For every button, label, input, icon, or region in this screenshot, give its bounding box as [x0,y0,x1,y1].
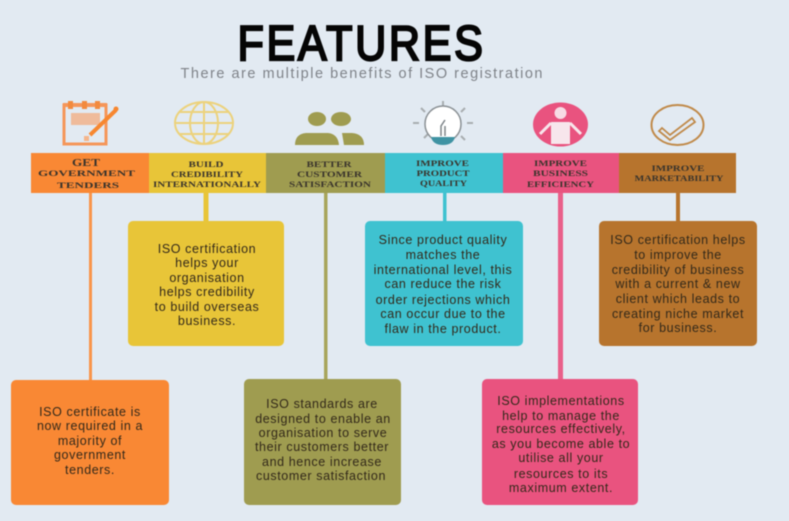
connector: cyan [443,193,446,222]
panel: product quality: order rejections which [376,293,510,307]
header: better customer satisfaction: BETTER [306,159,353,169]
header: get government tenders: GOVERNMENT [38,168,136,178]
header: improve product quality: QUALITY [420,178,467,188]
panel: customer satisfaction [244,379,401,505]
header: improve marketability: MARKETABILITY [634,173,724,183]
panel: government tenders: ISO certificate is [39,405,141,419]
icon: person in pink circle [533,102,588,146]
header: better customer satisfaction: CUSTOMER [297,169,363,179]
icon: globe [175,102,233,144]
panel: credibility: helps credibility [159,285,255,299]
panel: marketability: creating niche market [612,307,744,321]
panel: product quality [365,221,523,346]
panel: credibility: organisation [169,271,245,285]
header: improve product quality: PRODUCT [416,168,470,178]
header: build credibility internationally: BUILD [188,159,224,169]
panel: business efficiency [482,379,638,505]
panel: credibility [128,221,284,346]
header: get government tenders: TENDERS [57,180,119,190]
header: build credibility internationally [149,153,266,193]
subtitle: There are multiple benefits of ISO registration [180,66,542,82]
panel: business efficiency: utilise all your [518,451,604,465]
header: improve marketability: IMPROVE [652,163,705,173]
header: better customer satisfaction [266,153,385,193]
panel: government tenders: majority of [58,434,122,448]
panel: credibility: ISO certification [158,242,256,256]
header: get government tenders [31,153,149,193]
panel: business efficiency: maximum extent. [509,481,613,495]
panel: marketability: for business. [639,321,717,335]
title: FEATURES [238,17,486,71]
panel: customer satisfaction: and hence increase [262,455,382,469]
panel: credibility: to build overseas [155,300,259,314]
header: improve business efficiency: BUSINESS [533,168,588,178]
panel: marketability: ISO certification helps [610,233,746,247]
panel: marketability [599,221,757,346]
connector: yellow [204,193,208,222]
header bar [31,153,736,193]
panel: product quality: matches the [406,248,480,262]
icon: light bulb [413,101,473,145]
panel: government tenders [11,380,169,505]
header: improve business efficiency: IMPROVE [534,158,587,168]
panel: business efficiency: as you become able to [492,437,630,451]
panel: product quality: Since product quality [379,233,507,247]
panel: government tenders: now required in a [37,419,143,433]
panel: customer satisfaction: their customers better [255,440,389,454]
panel: customer satisfaction: ISO standards are [266,397,378,411]
panel: product quality: can reduce the risk [384,277,502,291]
icon: check mark badge [652,105,704,145]
header: build credibility internationally: CREDIBILITY [171,169,243,179]
header: better customer satisfaction: SATISFACTION [289,179,372,189]
header: improve business efficiency [503,153,619,193]
panel: business efficiency: resources effectively, [496,422,626,436]
panel: marketability: to improve the [634,248,722,262]
panel: customer satisfaction: designed to enable an [255,412,391,426]
header: improve business efficiency: EFFICIENCY [527,179,594,189]
panel: business efficiency: help to manage the [502,409,620,423]
connector: orange [89,193,92,381]
panel: business efficiency: resources to its [514,467,608,481]
connector: olive [324,193,328,380]
header: get government tenders: GET [72,157,101,169]
panel: marketability: with a current & new [614,277,741,291]
panel: business efficiency: ISO implementations [497,394,625,408]
header: build credibility internationally: INTERNATIONALLY [153,179,261,189]
connector: pink [558,193,563,380]
panel: product quality: international level, this [374,263,512,277]
panel: government tenders: government [54,448,126,462]
header: improve marketability [619,153,736,193]
panel: customer satisfaction: customer satisfaction [256,469,386,483]
panel: product quality: can occur due to the [380,307,506,321]
panel: credibility: helps your [175,256,239,270]
panel: product quality: flaw in the product. [385,322,501,336]
panel: marketability: credibility of business [612,263,744,277]
panel: marketability: client which leads to [616,292,740,306]
header: improve product quality: IMPROVE [416,158,469,168]
connector: brown [676,193,680,222]
panel: customer satisfaction: organisation to serve [259,426,387,440]
header: improve product quality [385,153,503,193]
icon: notepad and pencil [63,101,118,144]
panel: credibility: business. [178,314,236,328]
icon: two people [295,112,364,145]
panel: government tenders: tenders. [65,463,115,477]
